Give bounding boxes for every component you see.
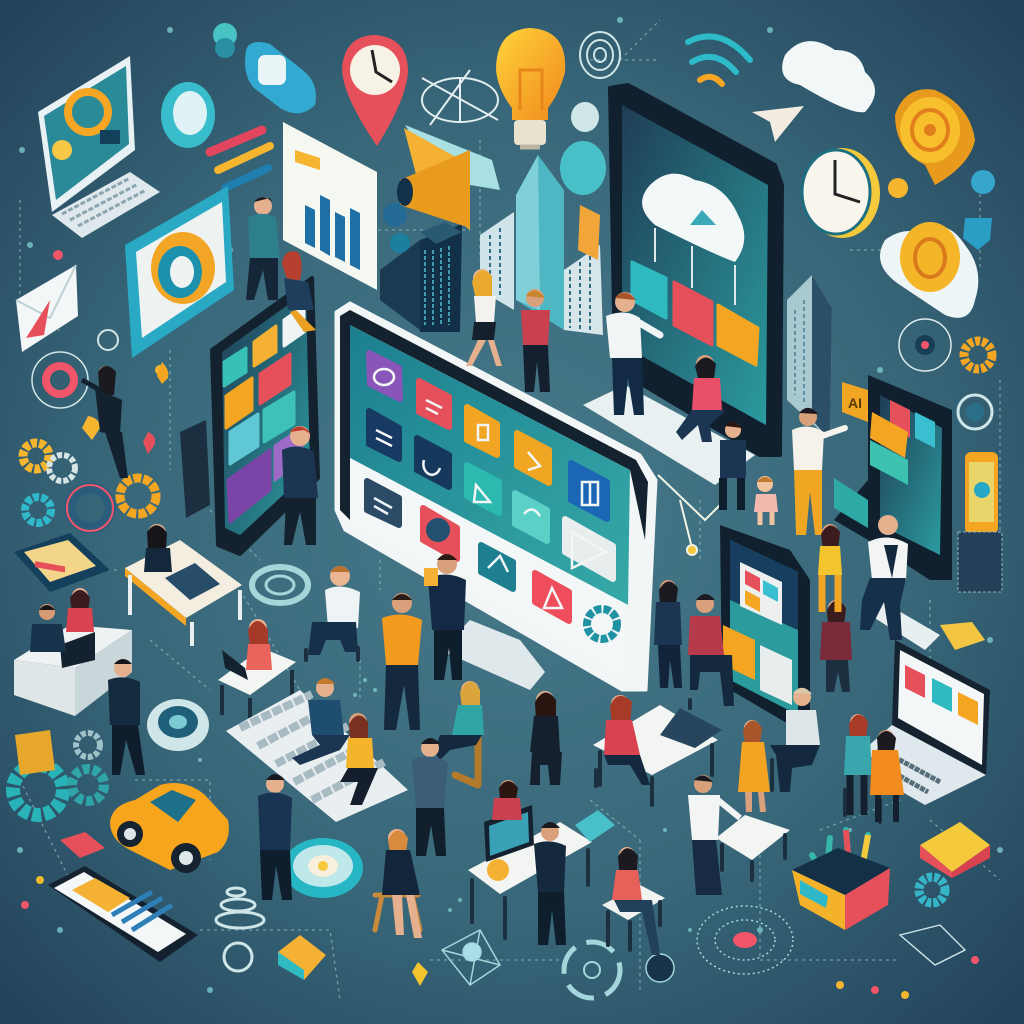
person: suit man lower left (108, 659, 145, 775)
desks center bottom (306, 648, 880, 950)
left phone (212, 278, 318, 554)
person: sitting white shirt (308, 566, 360, 655)
laptop tray left (14, 533, 110, 592)
small phone far right (965, 452, 998, 534)
small label tag AI: AI (848, 395, 862, 411)
network sphere icon (422, 70, 498, 125)
person: man yellow pants (792, 408, 845, 535)
framed card left (125, 186, 234, 358)
icon: paper plane (752, 106, 804, 142)
icon: round badge (161, 23, 237, 148)
monitor top left (38, 56, 160, 238)
horn megaphone and yellow folder (383, 102, 606, 253)
tablet bottom left (48, 866, 198, 962)
side table woman (602, 885, 665, 950)
person: standing man top (246, 197, 280, 300)
clock (802, 148, 880, 238)
person: man sitting grey (770, 688, 820, 792)
person: woman orange dress (738, 720, 770, 812)
office buildings (380, 155, 832, 440)
box on desk (575, 810, 615, 842)
concentric target icon (580, 32, 620, 78)
circuit block (958, 532, 1002, 592)
person: woman pink sitting (612, 847, 660, 955)
gear and constellation bottom right (900, 877, 965, 965)
desk center right (593, 705, 722, 805)
key floor (226, 690, 408, 822)
icon: pencils (210, 130, 270, 188)
person: man red shirt top (521, 289, 550, 392)
small label tag AI (842, 382, 868, 422)
person: woman sitting top (282, 251, 316, 332)
round badge far right (899, 319, 992, 429)
small hexagon icons (888, 170, 995, 250)
person: man white shirt lower (688, 775, 740, 895)
tag orange lower right (870, 600, 985, 650)
upper right tablet (610, 85, 782, 455)
speech pin target (895, 89, 975, 185)
person: woman pink sitting platform (676, 355, 726, 442)
wifi icon (688, 36, 750, 84)
envelope icon (16, 265, 165, 375)
computer desk (468, 805, 592, 938)
right mini tablet (834, 375, 952, 580)
person: man reception (30, 604, 66, 652)
network globe (442, 906, 793, 998)
disk ring left (147, 699, 209, 751)
person: woman on keyboard (340, 713, 378, 805)
person: man navy computer (534, 822, 566, 945)
laptop right (850, 640, 990, 805)
person: suit man phone (258, 774, 292, 900)
gears lower left (13, 730, 105, 858)
desk: woman at table left (125, 540, 242, 646)
home box (278, 935, 428, 986)
person: woman blonde top (466, 269, 502, 366)
person: man navy platform (720, 421, 746, 510)
light bulb (496, 28, 565, 147)
person: man red sweater (688, 594, 734, 706)
desk lower right (716, 815, 790, 880)
person: woman teal (434, 681, 484, 760)
person: woman navy (654, 580, 682, 688)
person: man white shirt tablet (606, 292, 660, 415)
concentric ring floor (252, 567, 308, 603)
person: woman reception (66, 588, 94, 632)
wooden chair (455, 720, 478, 785)
person: woman gears (82, 366, 128, 478)
person: man grey suit (412, 738, 448, 856)
gears left (23, 330, 156, 531)
icon: cloud top right (782, 41, 875, 112)
people (30, 197, 908, 955)
person: woman orange laptop (870, 730, 904, 822)
map pin with clock (342, 35, 408, 146)
person: man orange (382, 593, 422, 730)
person: child (754, 476, 778, 525)
desk: reception left (14, 625, 132, 716)
chairs at desks (306, 648, 880, 822)
person: woman yellow (818, 524, 842, 612)
person: woman laptop desk (246, 619, 272, 670)
person: man at left phone (282, 426, 318, 545)
white platform (583, 385, 755, 485)
person: woman black (530, 691, 562, 785)
person: woman red sitting computer (492, 780, 522, 820)
yellow car (110, 783, 229, 873)
wifi floor icon (216, 888, 264, 971)
person: bald man seated right (860, 515, 908, 640)
person: woman maroon (820, 600, 852, 692)
person: man viewing screen (424, 554, 466, 680)
person: man on keyboard (292, 678, 350, 765)
small teal slab (82, 362, 210, 518)
large central monitor (336, 303, 656, 690)
monitor stand (440, 620, 545, 690)
person: woman navy dress (382, 829, 422, 938)
cloud with headset (880, 222, 978, 318)
stool (375, 895, 420, 930)
phone center right (720, 525, 810, 730)
person: woman red desk (604, 695, 650, 785)
flower disk (283, 838, 363, 898)
pencil box (792, 830, 890, 930)
icon: chat cloud (245, 42, 316, 113)
person: woman teal right (844, 714, 872, 815)
presentation board (283, 122, 377, 290)
orange box (920, 822, 990, 878)
funnel triangle icon (658, 475, 720, 555)
desk: woman laptop center left (218, 648, 296, 718)
cloud (642, 174, 744, 262)
person: woman desk left (144, 524, 172, 572)
